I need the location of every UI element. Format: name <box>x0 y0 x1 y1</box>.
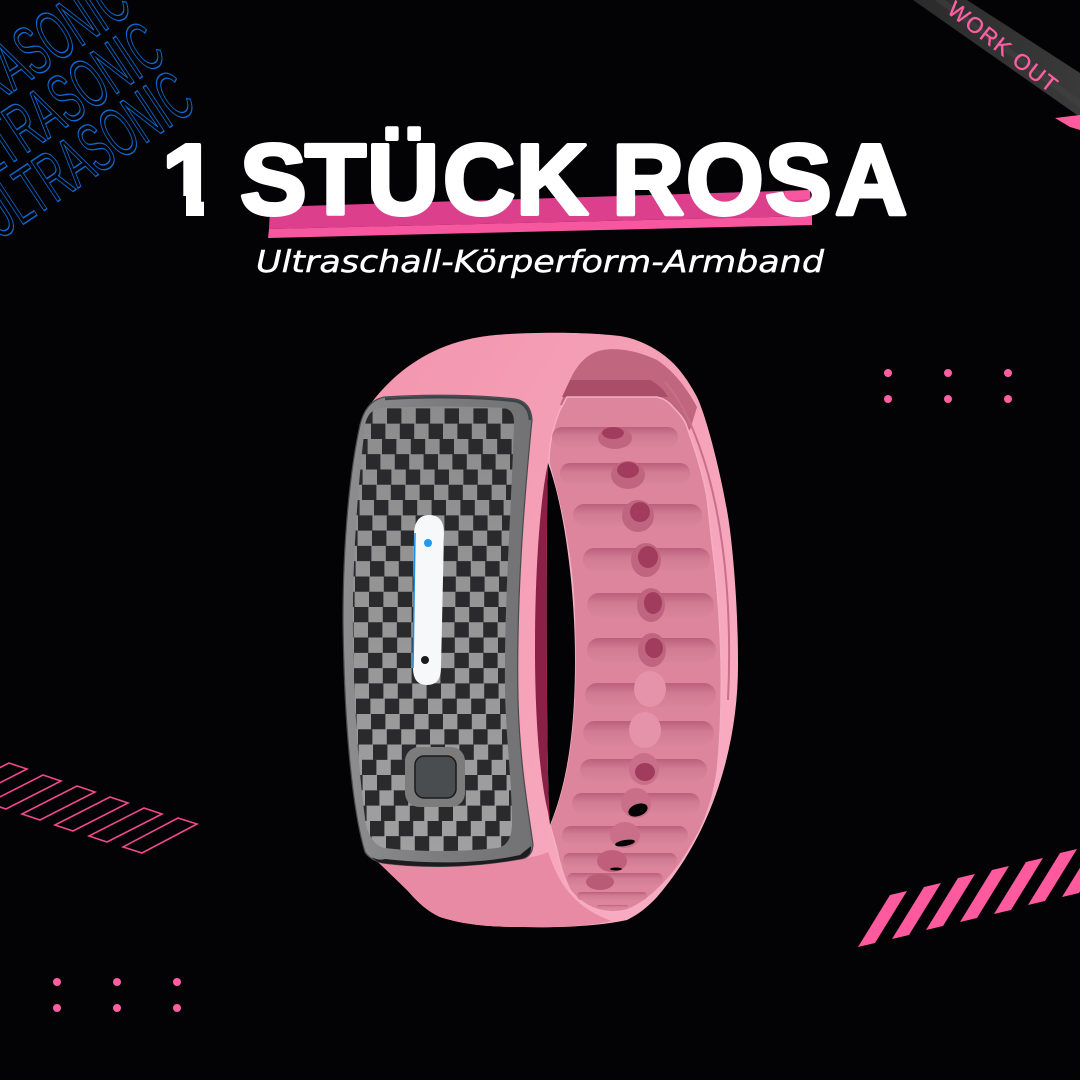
decorative ultrasonic outline text <box>0 0 206 254</box>
device module bezel <box>343 395 533 866</box>
wristband product image <box>325 333 738 927</box>
dots top right <box>884 369 1012 403</box>
subtitle: Ultraschall-Körperform-Armband <box>256 245 825 280</box>
band inside dark stripe <box>562 380 668 397</box>
strap holes and pegs <box>586 427 666 890</box>
maroon inner wall <box>535 463 550 825</box>
white indicator pill <box>413 515 444 685</box>
inner strap <box>549 397 721 912</box>
module top chrome edge <box>385 397 530 420</box>
band outer silhouette <box>372 333 738 927</box>
band inside top shadow <box>560 349 697 430</box>
checker panel <box>352 406 514 851</box>
power button <box>405 747 465 807</box>
outlined stripes left <box>0 763 197 853</box>
solid stripes right <box>858 841 1080 947</box>
title: 1 STÜCK ROSA <box>162 124 907 236</box>
work out ribbon <box>913 0 1080 130</box>
strap slots <box>552 427 716 908</box>
module bottom edge <box>372 846 531 866</box>
strap edge line <box>665 382 729 700</box>
dots bottom left <box>53 978 181 1012</box>
title highlight bar <box>268 190 812 238</box>
mask removing the foot of the numeral <box>158 196 224 220</box>
band bottom outer face <box>378 852 612 927</box>
gap through band <box>547 463 575 825</box>
